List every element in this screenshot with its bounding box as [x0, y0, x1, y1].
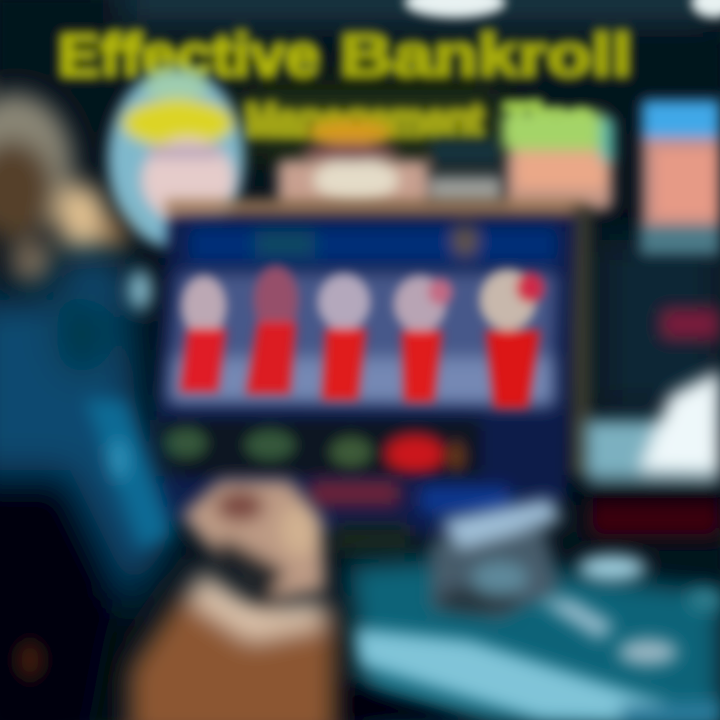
person's arm and hand	[130, 480, 335, 720]
monitor	[150, 200, 592, 553]
keyboard and items on desk	[430, 498, 720, 665]
lower red panel	[310, 480, 510, 553]
bottom buttons	[150, 420, 480, 476]
poster: right	[502, 112, 614, 210]
ceiling lights	[405, 0, 720, 17]
right side glow and red objects	[585, 308, 720, 537]
fist	[182, 480, 325, 600]
title	[58, 22, 632, 146]
forearm	[130, 570, 335, 720]
poster: far right	[640, 100, 720, 255]
monitor frame	[150, 200, 592, 540]
reel 5	[480, 270, 544, 408]
desk	[348, 560, 720, 720]
desk light strip	[340, 628, 720, 720]
person's head	[0, 93, 126, 284]
reel 3	[318, 274, 370, 400]
title: Bankroll	[340, 22, 632, 89]
reel 2	[246, 266, 298, 394]
title: Tips	[505, 94, 593, 146]
title: Effective	[58, 22, 320, 89]
reel columns	[180, 266, 544, 408]
poster: round left	[108, 68, 244, 248]
background wall	[120, 0, 720, 410]
reels panel	[166, 272, 558, 408]
person's torso in blue shirt	[0, 255, 170, 720]
title: Management	[245, 94, 483, 146]
shirt sleeve highlight	[16, 270, 172, 680]
screen header band	[188, 226, 558, 264]
reel 4	[394, 276, 452, 402]
poster: centre	[278, 120, 502, 206]
reel 1	[180, 276, 226, 392]
